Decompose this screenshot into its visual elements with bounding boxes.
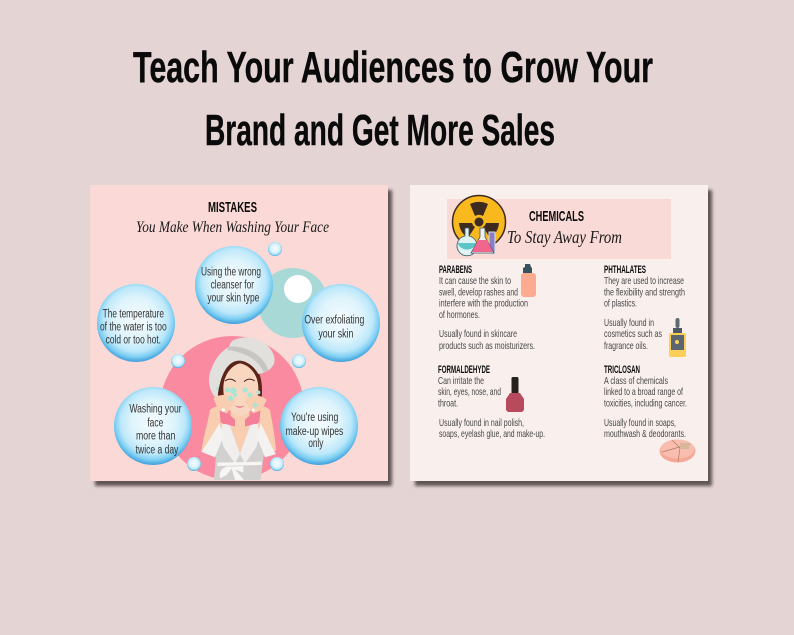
bubble: water temperature: cold or too hot.: [106, 333, 161, 347]
section: phthalates: of plastics.: [604, 298, 637, 310]
section: triclosan: mouthwash & deodorants.: [604, 428, 686, 440]
section: phthalates: [604, 264, 685, 352]
subheading: you make when washing your face: You Make When Washing Your Face: [136, 219, 329, 236]
icon: foundation bottle: [521, 264, 536, 297]
bubble: using the wrong cleanser: cleanser for: [211, 277, 254, 291]
section: parabens: swell, develop rashes and: [439, 286, 518, 298]
section: triclosan: A class of chemicals: [604, 375, 668, 387]
bubble: water temperature: The temperature: [103, 306, 164, 320]
section: parabens: It can cause the skin to: [439, 275, 511, 287]
panel: mistakes: [90, 185, 392, 486]
bubble: using the wrong cleanser: [195, 246, 273, 324]
bubble: using the wrong cleanser: your skin type: [207, 291, 260, 305]
header band: [447, 199, 671, 259]
section: parabens: products such as moisturizers.: [439, 340, 535, 352]
section: triclosan: toxicities, including cancer.: [604, 398, 687, 410]
icon: soap: [660, 440, 696, 462]
icon: flasks: [457, 228, 495, 256]
bubble: water temperature: [97, 284, 175, 362]
section: phthalates: PHTHALATES: [604, 264, 646, 276]
bubble: make-up wipes: You're using: [291, 410, 338, 424]
section: triclosan: TRICLOSAN: [604, 364, 640, 376]
section: triclosan: Usually found in soaps,: [604, 417, 676, 429]
bubble: make-up wipes: make-up wipes: [286, 424, 343, 438]
section: phthalates: cosmetics such as: [604, 328, 662, 340]
icon: serum bottle: [669, 318, 686, 357]
title: Brand and Get More Sales: [205, 106, 555, 155]
bubble: washing more than twice a day: face: [147, 415, 164, 429]
section: formaldehyde: Usually found in nail polish,: [439, 417, 524, 429]
bubble: over exfoliating: [302, 284, 380, 362]
title: [133, 43, 653, 155]
section: formaldehyde: throat.: [438, 398, 458, 410]
icon: radiation symbol: [452, 196, 506, 248]
section: formaldehyde: FORMALDEHYDE: [438, 364, 490, 376]
bubble: over exfoliating: your skin: [318, 326, 353, 340]
section: phthalates: fragrance oils.: [604, 340, 648, 352]
section: formaldehyde: Can irritate the: [438, 375, 484, 387]
bubble: water temperature: of the water is too: [100, 320, 167, 334]
panel: chemicals: [410, 185, 712, 486]
icon: nail polish: [506, 377, 524, 412]
illustration: woman washing face: [201, 338, 276, 480]
section: triclosan: linked to a broad range of: [604, 386, 683, 398]
section: formaldehyde: [438, 364, 545, 440]
bubble: over exfoliating: Over exfoliating: [304, 313, 364, 327]
heading: mistakes: MISTAKES: [208, 199, 257, 216]
section: phthalates: the flexibility and strength: [604, 286, 685, 298]
section: parabens: of hormones.: [439, 309, 480, 321]
section: formaldehyde: soaps, eyelash glue, and make-up.: [439, 428, 545, 440]
section: phthalates: They are used to increase: [604, 275, 684, 287]
bubble: washing more than twice a day: [114, 387, 192, 465]
section: phthalates: Usually found in: [604, 317, 654, 329]
bubble: using the wrong cleanser: Using the wrong: [201, 265, 261, 279]
section: triclosan: [604, 364, 687, 440]
bubble: washing more than twice a day: more than: [136, 429, 175, 443]
bubble: make-up wipes: only: [308, 436, 323, 450]
illustration background circles: [160, 268, 328, 480]
section: parabens: [439, 264, 535, 352]
bubble: washing more than twice a day: twice a day: [136, 442, 178, 456]
heading: chemicals: CHEMICALS: [529, 208, 584, 225]
section: parabens: Usually found in skincare: [439, 328, 517, 340]
small decorative bubbles: [171, 242, 306, 471]
section: parabens: PARABENS: [439, 264, 472, 276]
section: parabens: interfere with the production: [439, 298, 528, 310]
bubble: washing more than twice a day: Washing your: [129, 401, 182, 415]
subheading: to stay away from: To Stay Away From: [507, 227, 622, 247]
section: formaldehyde: skin, eyes, nose, and: [438, 386, 501, 398]
bubble: make-up wipes: [280, 387, 358, 465]
